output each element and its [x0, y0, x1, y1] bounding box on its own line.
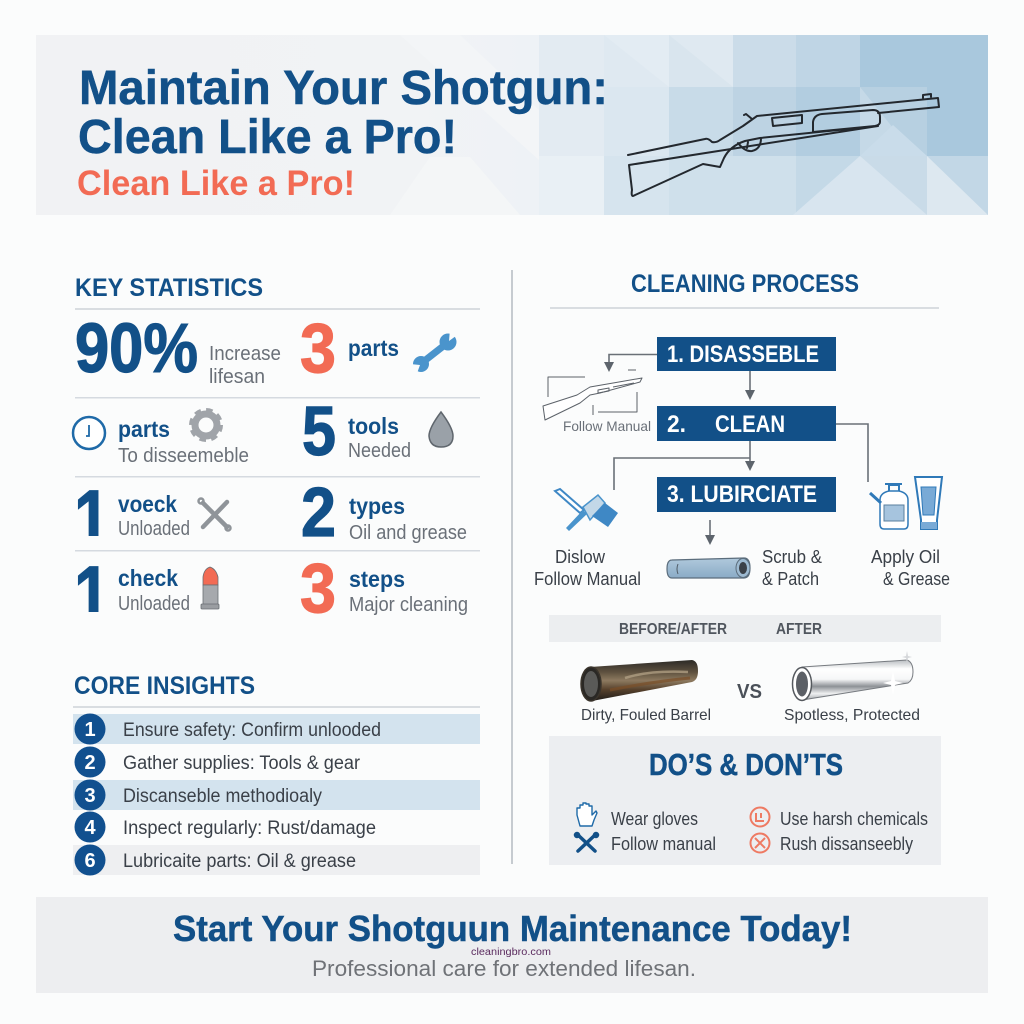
heading: core insights: CORE INSIGHTS	[74, 672, 255, 700]
image: dirty barrel	[581, 660, 698, 701]
icon: oil bottle and grease tube	[870, 477, 942, 529]
step 2 box: CLEAN	[715, 411, 785, 438]
insight 1	[74, 714, 381, 744]
stat: 1 voeck	[78, 490, 232, 536]
label: apply oil and grease	[871, 547, 950, 589]
stat: parts to disassemble	[73, 410, 249, 467]
step 2 box	[657, 406, 836, 441]
stat: 1 check	[78, 566, 220, 612]
stat: parts to disassemble: To disseemeble	[118, 445, 249, 467]
stat: 3 steps: 3	[300, 549, 336, 627]
insight 5: 6	[84, 850, 96, 872]
footer banner	[36, 897, 988, 993]
title: Clean Like a Pro!	[78, 111, 457, 164]
image: clean barrel	[792, 651, 913, 700]
before/after heading bar: AFTER	[776, 621, 822, 638]
stat: 3 steps: steps	[349, 566, 405, 592]
icon: crossed wrenches	[576, 834, 598, 851]
panel: before and after	[549, 615, 941, 724]
label: dislow follow manual: Follow Manual	[534, 569, 641, 589]
heading: do's and don'ts: DO’S & DON’TS	[649, 747, 843, 782]
icon: brush	[555, 489, 618, 531]
insight 1: Ensure safety: Confirm unlooded	[123, 720, 381, 741]
don't: harsh chemicals: Use harsh chemicals	[780, 809, 928, 829]
insight 5: Lubricaite parts: Oil & grease	[123, 851, 356, 872]
subtitle: Clean Like a Pro!	[77, 164, 355, 203]
insight 2	[74, 746, 361, 778]
panel: key statistics	[73, 274, 480, 641]
stat: 90% increase lifespan: 90%	[75, 309, 198, 387]
stat: 90% increase lifespan	[75, 309, 281, 388]
icon: clock	[73, 417, 105, 449]
insight 5	[74, 844, 356, 876]
don't: rush: Rush dissanseebly	[780, 834, 913, 854]
label: dislow follow manual: Dislow	[555, 547, 606, 567]
icon: disassembly gun diagram	[543, 370, 642, 420]
label: apply oil and grease: Apply Oil	[871, 547, 940, 567]
icon: bullet	[201, 567, 219, 609]
insight 3	[74, 780, 322, 810]
panel: cleaning process	[534, 270, 950, 589]
stat: 2 types: types	[349, 493, 405, 519]
stat: 3 parts	[300, 309, 399, 387]
stat: 2 types: Oil and grease	[349, 522, 467, 544]
heading: key statistics: KEY STATISTICS	[75, 274, 263, 302]
insight 3: Discanseble methodioaly	[123, 786, 322, 807]
arrows	[609, 354, 868, 540]
label: dislow follow manual	[534, 547, 641, 589]
label: scrub and patch: & Patch	[762, 569, 819, 589]
step 3 box: 3. LUBIRCIATE	[667, 481, 817, 508]
label: apply oil and grease: & Grease	[883, 569, 950, 589]
heading: cleaning process: CLEANING PROCESS	[631, 270, 859, 298]
insight 4: Inspect regularly: Rust/damage	[123, 818, 376, 839]
stat: 1 voeck: 1	[74, 474, 110, 565]
before/after heading bar	[549, 615, 941, 642]
stat: 5 tools: Needed	[348, 440, 411, 462]
stat: 5 tools: 5	[302, 392, 336, 470]
label: dirty barrel: Dirty, Fouled Barrel	[581, 707, 711, 724]
panel: core insights	[73, 672, 480, 876]
title	[78, 62, 608, 164]
stat: 2 types	[301, 473, 467, 551]
insight 4: 4	[84, 817, 96, 839]
footer subtext: Professional care for extended lifesan.	[312, 956, 696, 981]
stat: 2 types: 2	[301, 473, 336, 551]
insight 3: 3	[84, 785, 96, 807]
stat: 3 steps: Major cleaning	[349, 594, 468, 616]
icon: glove	[577, 803, 597, 826]
footer headline: Start Your Shotguun Maintenance Today!	[173, 908, 852, 949]
stat: 3 parts: parts	[348, 335, 399, 361]
stat: 1 check: Unloaded	[118, 593, 190, 615]
insight 4	[74, 812, 376, 842]
watermark: cleaningbro.com	[471, 947, 551, 958]
icon: shotgun outline	[628, 94, 939, 196]
stat: 1 voeck: voeck	[118, 491, 177, 517]
icon: gear	[191, 410, 221, 440]
before/after heading bar: BEFORE/AFTER	[619, 621, 727, 638]
icon: warning circle	[750, 808, 770, 826]
header banner	[36, 35, 988, 215]
insight 2: 2	[84, 752, 96, 774]
stat: 1 voeck: Unloaded	[118, 518, 190, 540]
icon: crossed tools	[198, 498, 230, 530]
stat: 1 check: check	[118, 565, 178, 591]
insight 2: Gather supplies: Tools & gear	[123, 753, 361, 774]
icon: oil drop	[429, 412, 453, 447]
stat: 1 check: 1	[74, 550, 110, 641]
title: Maintain Your Shotgun:	[79, 62, 608, 115]
insight 1: 1	[84, 719, 96, 741]
label: clean barrel: Spotless, Protected	[784, 707, 920, 724]
stat: 5 tools: tools	[348, 413, 399, 439]
vs label: VS	[737, 681, 762, 703]
do: wear gloves: Wear gloves	[611, 809, 698, 829]
icon: tube	[667, 558, 750, 578]
step 2 box: 2.	[667, 411, 686, 438]
stat: 3 parts: 3	[300, 309, 336, 387]
stat: 90% increase lifespan: lifesan	[209, 366, 265, 388]
label: follow manual: Follow Manual	[563, 418, 651, 434]
stat: 90% increase lifespan: Increase	[209, 343, 281, 365]
stat: parts to disassemble: parts	[118, 416, 170, 442]
stat: 3 steps	[300, 549, 468, 627]
do: follow manual: Follow manual	[611, 834, 716, 854]
step 1 box: 1. DISASSEBLE	[667, 341, 819, 368]
label: scrub and patch	[762, 547, 822, 589]
icon: cross circle	[750, 834, 770, 852]
stat: 5 tools	[302, 392, 453, 470]
icon: wrench	[410, 329, 460, 376]
label: scrub and patch: Scrub &	[762, 547, 822, 567]
panel: do's and don'ts	[549, 736, 941, 865]
